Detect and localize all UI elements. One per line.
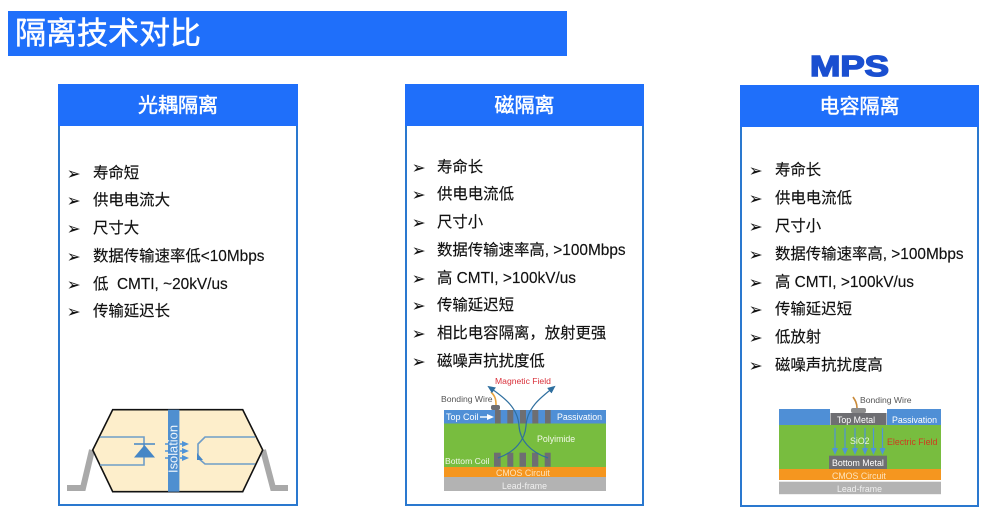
list: capacitive features: 高 CMTI, >100kV/us	[775, 274, 914, 291]
list: optocoupler features: 传输延迟长	[93, 303, 170, 320]
list: magnetic features	[412, 158, 626, 371]
diagram: capacitor cross-section: Top Metal	[837, 415, 875, 425]
diagram: capacitor cross-section: Electric Field	[887, 437, 937, 447]
panel: magnetic isolation	[405, 84, 644, 506]
list: magnetic features: 磁噪声抗扰度低	[437, 353, 545, 370]
list: magnetic features: ➢	[412, 352, 425, 371]
list: magnetic features: 相比电容隔离，放射更强	[437, 325, 606, 342]
diagram: magnetic coil cross-section: Lead-frame	[502, 481, 547, 491]
diagram: magnetic coil cross-section: Magnetic Field	[495, 376, 551, 386]
list: magnetic features: ➢	[412, 241, 425, 260]
list: capacitive features: ➢	[749, 161, 762, 180]
diagram: capacitor cross-section: CMOS Circuit	[832, 471, 886, 481]
diagram: magnetic coil cross-section: Top Coil	[446, 412, 479, 422]
list: optocoupler features: 寿命短	[93, 165, 139, 182]
list: capacitive features: ➢	[749, 273, 762, 292]
list: capacitive features: ➢	[749, 328, 762, 347]
list: capacitive features: 寿命长	[775, 162, 821, 179]
list: magnetic features: 尺寸小	[437, 214, 483, 231]
list: capacitive features	[749, 161, 964, 375]
list: optocoupler features: ➢	[67, 164, 80, 183]
list: optocoupler features: ➢	[67, 275, 80, 294]
list: magnetic features: 传输延迟短	[437, 297, 514, 314]
list: capacitive features: 磁噪声抗扰度高	[775, 357, 883, 374]
panel: optocoupler isolation	[58, 84, 298, 506]
list: magnetic features: 寿命长	[437, 159, 483, 176]
panel heading: capacitive: 电容隔离	[820, 96, 900, 118]
list: capacitive features: 传输延迟短	[775, 301, 852, 318]
list: optocoupler features: 数据传输速率低<10Mbps	[93, 248, 264, 265]
panel heading: magnetic: 磁隔离	[494, 95, 554, 117]
diagram: capacitor cross-section	[779, 395, 941, 494]
list: capacitive features: ➢	[749, 217, 762, 236]
list: capacitive features: 尺寸小	[775, 218, 821, 235]
diagram: magnetic coil cross-section: CMOS Circuit	[496, 468, 550, 478]
diagram: magnetic coil cross-section: Bonding Wire	[441, 394, 493, 404]
panel heading: optocoupler: 光耦隔离	[138, 95, 218, 117]
list: capacitive features: 供电电流低	[775, 190, 852, 207]
diagram: capacitor cross-section: Bottom Metal	[832, 458, 884, 468]
diagram: magnetic coil cross-section: Bottom Coil	[445, 456, 490, 466]
diagram: magnetic coil cross-section	[441, 376, 606, 491]
list: optocoupler features: 尺寸大	[93, 220, 139, 237]
list: capacitive features: ➢	[749, 356, 762, 375]
list: optocoupler features: 供电电流大	[93, 192, 170, 209]
panel heading: capacitive	[740, 85, 979, 127]
diagram: capacitor cross-section: Passivation	[892, 415, 937, 425]
list: magnetic features: ➢	[412, 185, 425, 204]
diagram: optocoupler package	[67, 410, 288, 492]
list: optocoupler features: ➢	[67, 302, 80, 321]
panel: capacitive isolation	[740, 85, 979, 507]
list: capacitive features: ➢	[749, 300, 762, 319]
list: magnetic features: ➢	[412, 324, 425, 343]
diagram: magnetic coil cross-section: Passivation	[557, 412, 602, 422]
list: magnetic features: 供电电流低	[437, 186, 514, 203]
title	[8, 11, 567, 56]
panel heading: magnetic	[405, 84, 644, 126]
diagram: magnetic coil cross-section: Polyimide	[537, 434, 575, 444]
list: magnetic features: ➢	[412, 158, 425, 177]
list: magnetic features: ➢	[412, 213, 425, 232]
list: optocoupler features: ➢	[67, 247, 80, 266]
diagram: optocoupler package: Isolation	[166, 425, 180, 473]
panel heading: optocoupler	[58, 84, 298, 126]
diagram: capacitor cross-section: Lead-frame	[837, 484, 882, 494]
list: magnetic features: ➢	[412, 296, 425, 315]
list: capacitive features: 数据传输速率高, >100Mbps	[775, 246, 964, 263]
title: 隔离技术对比	[15, 16, 201, 51]
logo: MPS: MPS	[810, 51, 889, 83]
diagram: capacitor cross-section: SiO2	[850, 436, 870, 446]
list: capacitive features: ➢	[749, 189, 762, 208]
list: optocoupler features	[67, 164, 264, 321]
list: magnetic features: 高 CMTI, >100kV/us	[437, 270, 576, 287]
list: capacitive features: ➢	[749, 245, 762, 264]
list: optocoupler features: 低 CMTI, ~20kV/us	[93, 276, 228, 293]
list: optocoupler features: ➢	[67, 191, 80, 210]
list: optocoupler features: ➢	[67, 219, 80, 238]
diagram: capacitor cross-section: Bonding Wire	[860, 395, 912, 405]
list: magnetic features: ➢	[412, 269, 425, 288]
list: capacitive features: 低放射	[775, 329, 821, 346]
list: magnetic features: 数据传输速率高, >100Mbps	[437, 242, 626, 259]
